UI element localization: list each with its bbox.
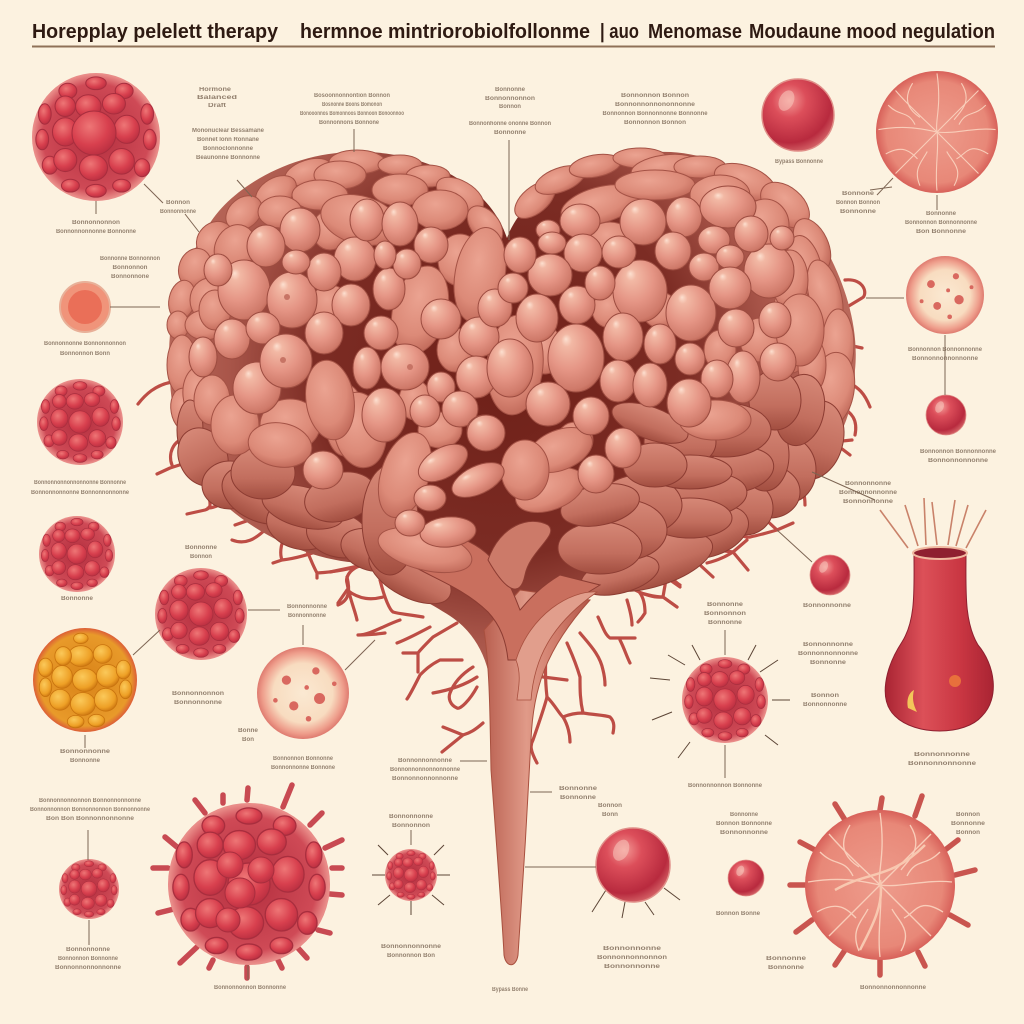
labels: Bosnonne Boons Bomonon xyxy=(322,102,382,108)
spiked cell centre right xyxy=(650,645,790,760)
labels: Bonnonnonnonnonne xyxy=(55,965,122,971)
labels: Bonnonnonne xyxy=(604,964,661,970)
labels: Bypass Bonne xyxy=(492,987,529,993)
sausage gyri xyxy=(245,186,599,581)
labels: Bonnonnon Bonnon xyxy=(624,120,686,126)
orange cell xyxy=(33,628,137,732)
labels: Bonnonnonnonne xyxy=(398,758,453,764)
title: Menomase xyxy=(648,21,742,43)
labels: Bonnonhonne ononne Bonnon xyxy=(469,121,551,127)
labels: Bonnonnonnon Bonnonnonnon Bonnonnonne xyxy=(30,807,151,813)
labels: Bonnonnonnonnonne xyxy=(392,776,459,782)
labels: Bonnonnonnonne xyxy=(381,944,442,950)
title xyxy=(32,21,995,43)
labels: Bonnonnonne xyxy=(66,947,111,953)
title: Horepplay pelelett therapy xyxy=(32,21,279,43)
labels: Bonnon xyxy=(190,554,212,560)
main heart-shaped organ xyxy=(165,148,860,965)
labels: Bonnone xyxy=(842,191,875,197)
labels: Bonnon xyxy=(499,104,521,110)
big spiked cell xyxy=(153,785,342,978)
labels: Bonnonnonnonnonnonne xyxy=(390,767,461,773)
labels: Bonnonne xyxy=(951,821,986,827)
lobule pits xyxy=(280,294,413,370)
labels: Beaunonne Bonnonne xyxy=(196,155,261,161)
labels: Bonnonne xyxy=(70,758,101,764)
labels: Bonnon xyxy=(166,200,190,206)
filler gyri xyxy=(194,190,824,521)
labels: Bonnonnon Bonnonne xyxy=(58,956,119,962)
labels: Bonnonnonnonnon xyxy=(597,955,667,961)
labels: Bonnonne xyxy=(926,211,957,217)
labels: Bonnonnon Bonnonnonne xyxy=(920,449,997,455)
rim lobes xyxy=(165,148,860,434)
labels: Bonnonne xyxy=(768,965,805,971)
labels: Bonnonne xyxy=(810,660,847,666)
small orange cell xyxy=(60,282,110,332)
cream cell centre left xyxy=(257,647,349,739)
labels: Bonnonnonne xyxy=(845,481,892,487)
labels: Bonne xyxy=(238,728,259,734)
cream cell right xyxy=(906,256,984,334)
labels: Bonnonnonne xyxy=(914,752,971,758)
sphere top right xyxy=(762,79,834,151)
labels: Bonnonnon Bonnon xyxy=(621,93,689,99)
labels: Bonnonne xyxy=(708,620,743,626)
cell left 2 xyxy=(37,379,123,465)
labels: Bonnonnonnononnonne xyxy=(615,102,696,108)
labels: Bonnonnon Bonnonnonne Bonnonne xyxy=(602,111,708,117)
labels: Bosoonnonnontion Bonnon xyxy=(314,93,390,99)
big veined cell xyxy=(790,796,975,975)
labels: Mononuclear Bessamane xyxy=(192,128,265,134)
labels: Bonnonnonne xyxy=(160,209,197,215)
labels: Bonnonnonnonnonnonne Bonnonne xyxy=(34,480,127,486)
labels: Bonnet lonn Ronnane xyxy=(197,137,260,143)
labels: Bonnonne xyxy=(707,602,744,608)
labels: Bonnonne xyxy=(494,130,527,136)
lower folds xyxy=(169,370,852,616)
labels: Bypass Bonnonne xyxy=(775,159,824,165)
labels: Bonnonnonnon xyxy=(172,691,224,697)
labels: Bonnonnonnon Bonnonne xyxy=(688,783,763,789)
title: Moudaune mood negulation xyxy=(749,21,995,43)
labels: Bonnon Bonnon xyxy=(836,200,880,206)
cell bottom left xyxy=(59,859,119,919)
labels: Bonnonnonne Bonnonnonnon xyxy=(44,341,126,347)
labels: Bonnonne xyxy=(495,87,526,93)
large nuclei xyxy=(216,852,274,932)
vase organ xyxy=(880,498,993,731)
labels: Bonnonnonne xyxy=(288,613,327,619)
labels: Bonnonnonnonnon Bonnonnonnonne xyxy=(39,798,142,804)
labels: Bonnonnonnonne Bonnonnonnonne xyxy=(31,490,130,496)
labels: Bonnon xyxy=(956,830,980,836)
labels: Bonnonnons Bonnone xyxy=(319,120,380,126)
central sphere xyxy=(72,111,116,155)
title: hermnoe mintriorobiolfollonme xyxy=(300,21,590,43)
labels: Bonnonnonne Bonnone xyxy=(271,765,336,771)
labels: Bonnonnonnonne Bonnonne xyxy=(56,229,137,235)
stem xyxy=(484,590,590,965)
labels: Bonnon xyxy=(811,693,839,699)
labels: Bonnon Bonne xyxy=(716,911,761,917)
labels: Bonnonnonne xyxy=(603,946,662,952)
labels: Bonnonnon Bonnonne xyxy=(273,756,334,762)
labels: Bonnonnonne xyxy=(174,700,223,706)
labels: Bonnon Bonnonne xyxy=(716,821,773,827)
leader lines xyxy=(85,129,945,980)
labels: Bonnonnonne xyxy=(389,814,434,820)
labels: Bonnonnonnonne xyxy=(908,761,977,767)
veined cell top right xyxy=(876,71,998,193)
round lobules xyxy=(189,186,796,549)
small sphere bottom xyxy=(728,860,764,896)
labels: Bonnon xyxy=(956,812,980,818)
labels: Bonnonnonne xyxy=(720,830,769,836)
labels: Bonnonne xyxy=(766,956,807,962)
labels: Bonnoclonnonne xyxy=(203,146,254,152)
labels: Bonnonnonne xyxy=(287,604,328,610)
cell mid left xyxy=(155,568,247,660)
labels: Bonnonnone xyxy=(111,274,150,280)
labels: Bonnon xyxy=(598,803,622,809)
labels: Hormone xyxy=(199,87,232,93)
labels: Bonnonne Bonnonnon xyxy=(100,256,160,262)
labels: Bonnonne xyxy=(559,786,598,792)
labels: Bonooonnos Bomonnoos Bonnoon Bonoonnoo xyxy=(300,111,404,117)
labels: Bonn xyxy=(602,812,618,818)
labels: Bonnonnonnon xyxy=(485,96,535,102)
labels: Bon Bon Bonnonnonnonne xyxy=(46,816,135,822)
labels: Bonnonnonne xyxy=(803,642,854,648)
labels: Bonnonne xyxy=(61,596,94,602)
labels: Bonnonnonnonne xyxy=(928,458,989,464)
title: | auo xyxy=(600,21,639,43)
labels: Bonnonne xyxy=(560,795,597,801)
organ base xyxy=(169,152,856,680)
labels: Bonnonnon Bon xyxy=(387,953,435,959)
labels: Bonnonnonne xyxy=(803,603,852,609)
labels: Bonnonne xyxy=(185,545,218,551)
labels: Bonnonnonnon xyxy=(72,220,120,226)
labels: Bonnonnon Bonnonnonne xyxy=(905,220,978,226)
labels: Bonnonne xyxy=(840,209,877,215)
cell top left xyxy=(32,73,160,201)
labels: Bonnonnonnonne xyxy=(839,490,898,496)
labels: Bon Bonnonne xyxy=(916,229,967,235)
labels: Bonnonnonne xyxy=(843,499,894,505)
labels: Bonnonnon xyxy=(392,823,430,829)
small sphere right xyxy=(926,395,966,435)
labels: Bonnonnon xyxy=(704,611,746,617)
small sphere lower right xyxy=(810,555,850,595)
cell left 3 xyxy=(39,516,115,592)
small spiked cell xyxy=(372,845,450,915)
labels: Bonnonnonnon Bonnonne xyxy=(214,985,287,991)
labels: Bonnonnonnonnonne xyxy=(860,985,927,991)
central funnel folds xyxy=(390,531,600,660)
labels: Bonnonnonnonnonne xyxy=(912,356,979,362)
labels: Bonnonnonne xyxy=(803,702,848,708)
labels: Bon xyxy=(242,737,254,743)
labels: Bonnonne xyxy=(730,812,759,818)
labels: Bonnonnon Bonnonnonne xyxy=(908,347,983,353)
labels: Bonnonnon Bonn xyxy=(60,351,110,357)
labels: Bonnonnon xyxy=(112,265,148,271)
blood vessels xyxy=(138,280,870,763)
labels: Balanced xyxy=(197,95,237,101)
labels: Bonnonnonnonne xyxy=(798,651,859,657)
sphere bottom centre xyxy=(592,828,680,918)
labels: Bonnonnonne xyxy=(60,749,111,755)
labels: Draft xyxy=(208,103,226,109)
